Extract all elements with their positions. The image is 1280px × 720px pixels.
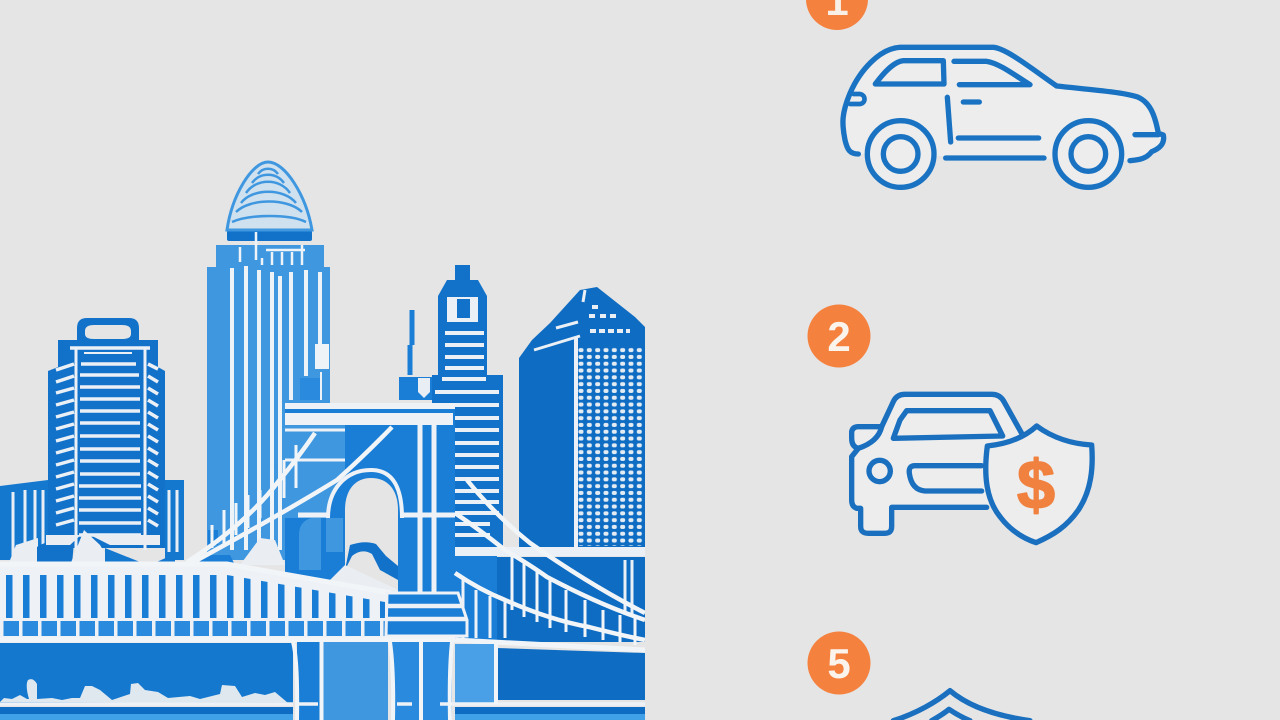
building: round-capped tower: [48, 318, 165, 550]
bridge tower: [285, 403, 455, 600]
step 2 badge: [808, 304, 870, 368]
river and piers: [0, 642, 645, 720]
icon: hatchback car: [843, 47, 1164, 187]
bridge: right deck: [455, 573, 645, 650]
trees and ground behind the deck: [8, 530, 285, 565]
icon: shield top, cropped: [893, 691, 1030, 720]
deck roadway: [0, 638, 455, 642]
step 3 badge: 5: [827, 640, 851, 687]
bridge: central pier block: [386, 593, 467, 636]
step 1 badge: [806, 0, 868, 30]
bridge: main cables: [187, 427, 645, 645]
step 3 badge: [808, 632, 870, 694]
building: domed central tower: [207, 162, 330, 560]
chart edge cover: [645, 150, 655, 720]
building: far left low block: [0, 480, 184, 560]
icon: dollar sign: $: [1017, 447, 1055, 523]
icon: car with dollar shield: [852, 394, 1092, 543]
bridge: right side backing: [455, 547, 645, 642]
building: stepped tower with antenna: [399, 265, 503, 548]
step 2 badge: 2: [827, 313, 851, 360]
skyline illustration: [0, 150, 655, 720]
building: angled roof tower with dotted windows: [519, 287, 645, 548]
bridge: left deck and suspenders: [0, 562, 391, 640]
